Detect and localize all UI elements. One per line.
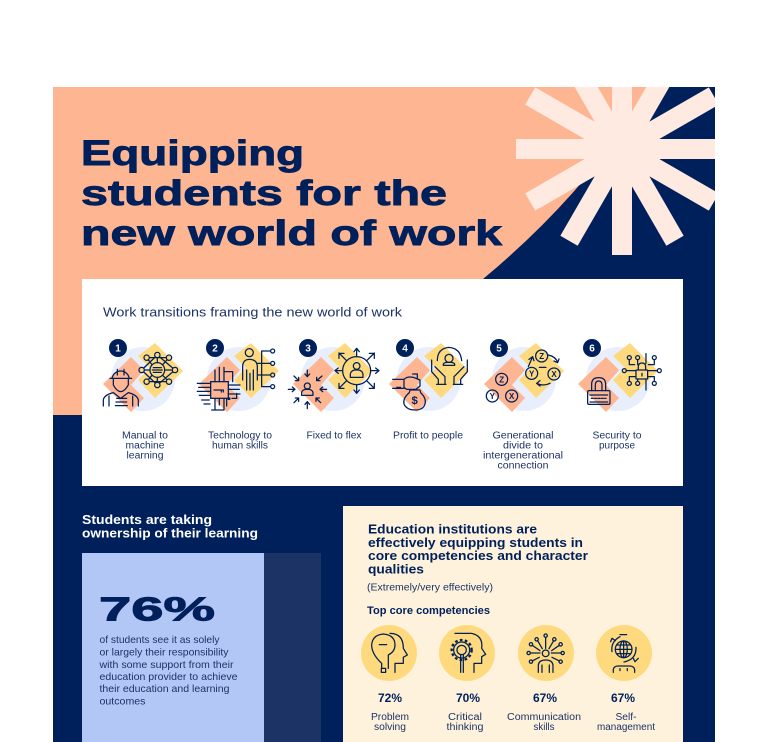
panel: peach header shape: [53, 87, 650, 415]
competency: communication skills: skills: [534, 722, 554, 733]
transition 5: generational divide to intergenerational connection: 5: [496, 344, 502, 354]
panel: navy background: [53, 87, 715, 742]
transition 5: generational divide to intergenerational connection: [483, 339, 564, 472]
transition 5: generational divide to intergenerational connection: connection: [498, 460, 548, 472]
transition 5: generational divide to intergenerational connection: X: [509, 392, 515, 401]
transition 4: profit to people: $: [412, 395, 419, 407]
transition 4: profit to people: [389, 339, 469, 442]
competency: communication skills: 67%: [533, 691, 557, 705]
competency: critical thinking: thinking: [446, 722, 484, 733]
heading: education institutions: Education institutions are: [368, 522, 537, 536]
competency: problem solving: [361, 625, 417, 733]
competency: critical thinking: 70%: [456, 691, 480, 705]
competency: communication skills: Communication: [507, 712, 581, 723]
transition 6: security to purpose: 6: [589, 344, 595, 354]
transition 3: fixed to flex: 3: [305, 344, 311, 354]
competency: communication skills: [507, 625, 581, 733]
note: extremely/very effectively: (Extremely/very effectively): [367, 582, 493, 594]
panel: work transitions: [82, 279, 683, 486]
transition 1: manual to machine learning: learning: [126, 450, 164, 462]
transition 3: fixed to flex: [288, 339, 379, 442]
competency: critical thinking: [439, 625, 495, 733]
transition 5: generational divide to intergenerational connection: Z: [499, 375, 504, 384]
heading: work transitions: Work transitions framing the new world of work: [103, 304, 403, 320]
heading: education institutions: core competencies and character: [368, 548, 588, 563]
transition 6: security to purpose: purpose: [599, 440, 635, 452]
transition 5: generational divide to intergenerational connection: intergenerational: [483, 450, 563, 462]
heading: students taking ownership: ownership of their learning: [82, 526, 258, 540]
stat description: or largely their responsibility: [100, 646, 229, 658]
subheading: top core competencies: Top core competencies: [367, 605, 490, 617]
icon: sunburst: [516, 87, 715, 255]
panel: education institutions: [343, 506, 683, 742]
title: students for the: [81, 174, 447, 213]
transition 2: technology to human skills: Technology to: [208, 430, 272, 442]
competency: problem solving: solving: [374, 722, 406, 733]
stat description: [98, 634, 238, 708]
infographic: [53, 87, 715, 742]
transition 2: technology to human skills: [197, 339, 279, 452]
stat description: with some support from their: [98, 659, 234, 671]
competency: self-management: [596, 625, 655, 733]
transition 2: technology to human skills: human skills: [212, 440, 268, 452]
competency: problem solving: Problem: [371, 712, 409, 723]
stat description: their education and learning: [100, 683, 230, 695]
competency: self-management: Self-: [616, 712, 636, 723]
transition 6: security to purpose: Security to: [592, 430, 642, 442]
transition 5: generational divide to intergenerational connection: Z: [539, 352, 544, 361]
title: [81, 134, 503, 253]
transition 5: generational divide to intergenerational connection: divide to: [503, 440, 543, 452]
transition 4: profit to people: 4: [402, 344, 408, 354]
competency: critical thinking: Critical: [448, 712, 482, 723]
heading: students taking ownership: [82, 512, 258, 540]
stat description: outcomes: [100, 696, 146, 708]
transition 5: generational divide to intergenerational connection: Y: [490, 392, 496, 401]
transition 5: generational divide to intergenerational connection: Y: [529, 369, 535, 378]
competency: self-management: management: [597, 722, 655, 733]
transition 4: profit to people: Profit to people: [393, 430, 463, 442]
heading: education institutions: [368, 522, 588, 576]
transition 1: manual to machine learning: [103, 339, 183, 462]
stat panel: 76 percent: [82, 553, 321, 742]
transition 5: generational divide to intergenerational connection: X: [551, 370, 557, 379]
transition 1: manual to machine learning: machine: [126, 440, 165, 452]
stat description: education provider to achieve: [100, 671, 238, 683]
competency: self-management: 67%: [611, 691, 635, 705]
transition 6: security to purpose: [578, 339, 661, 452]
transition 5: generational divide to intergenerational connection: Generational: [492, 430, 554, 442]
stat description: of students see it as solely: [100, 634, 220, 646]
transition 1: manual to machine learning: 1: [115, 344, 121, 354]
heading: education institutions: effectively equipping students in: [368, 535, 583, 550]
title: new world of work: [81, 214, 503, 253]
competency: problem solving: 72%: [378, 691, 402, 705]
title: Equipping: [81, 134, 304, 173]
transition 2: technology to human skills: 2: [212, 344, 218, 354]
heading: students taking ownership: Students are taking: [82, 512, 212, 527]
heading: education institutions: qualities: [368, 562, 424, 576]
transition 3: fixed to flex: Fixed to flex: [306, 430, 362, 442]
transition 1: manual to machine learning: Manual to: [122, 430, 168, 442]
stat: 76%: 76%: [99, 590, 215, 628]
